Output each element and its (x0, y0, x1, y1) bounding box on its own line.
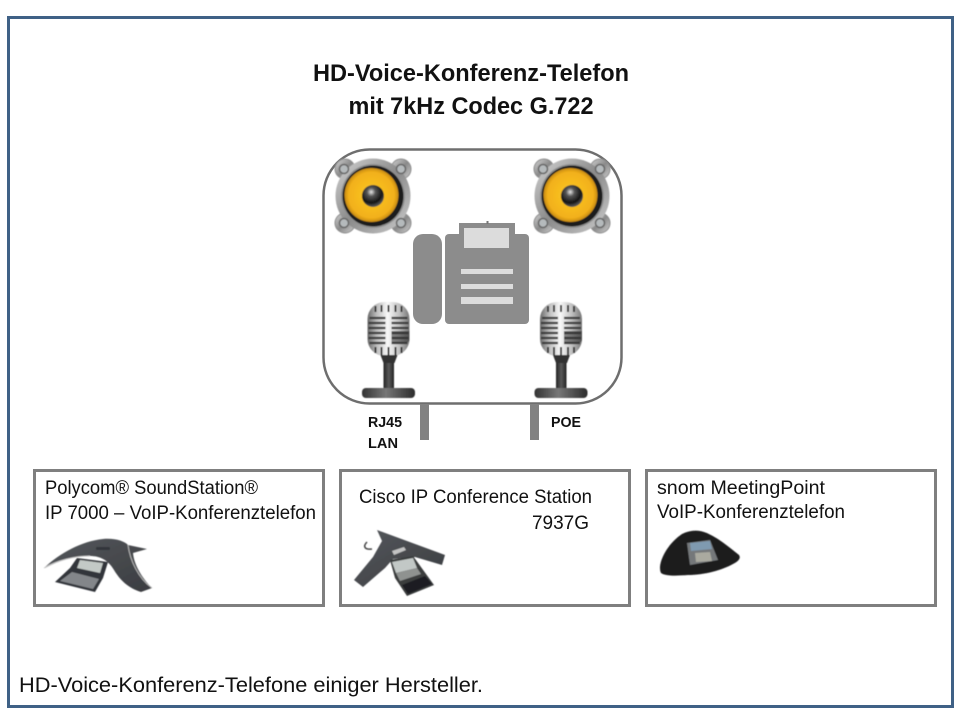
text: snom name: VoIP-Konferenztelefon (657, 502, 845, 523)
label: POE: POE (551, 414, 581, 431)
text: Cisco name: Cisco IP Conference Station (359, 487, 592, 508)
panel: conference phone diagram (324, 150, 622, 404)
icon: left speaker (335, 158, 411, 234)
icon: Polycom phone (44, 539, 152, 592)
text: Cisco name: 7937G (532, 513, 589, 534)
text: snom name (657, 478, 845, 523)
icon: snom phone (660, 531, 740, 576)
text: Polycom name: IP 7000 – VoIP-Konferenztelefon (45, 503, 316, 524)
label: RJ45 LAN (368, 414, 402, 452)
title (313, 60, 629, 120)
connector: POE (530, 404, 539, 440)
connector: RJ45 LAN (420, 404, 429, 440)
title: mit 7kHz Codec G.722 (348, 93, 594, 120)
caption: HD-Voice-Konferenz-Telefone einiger Hersteller. (19, 674, 483, 697)
icon: right microphone (534, 302, 588, 398)
icon: left microphone (362, 302, 415, 398)
label: RJ45 LAN: LAN (368, 435, 398, 452)
icon: right speaker (534, 158, 610, 234)
text: Cisco name (359, 487, 592, 534)
text: Polycom name (45, 478, 316, 524)
label: RJ45 LAN: RJ45 (368, 414, 402, 431)
text: Polycom name: Polycom® SoundStation® (45, 478, 258, 499)
panel: snom (646, 470, 936, 606)
device outline (324, 150, 622, 404)
panel: Polycom (34, 470, 324, 606)
icon: Cisco phone (354, 530, 445, 596)
icon: telephone (413, 221, 529, 324)
title: HD-Voice-Konferenz-Telefon (313, 60, 629, 87)
panel: Cisco (340, 470, 630, 606)
text: snom name: snom MeetingPoint (657, 478, 826, 499)
